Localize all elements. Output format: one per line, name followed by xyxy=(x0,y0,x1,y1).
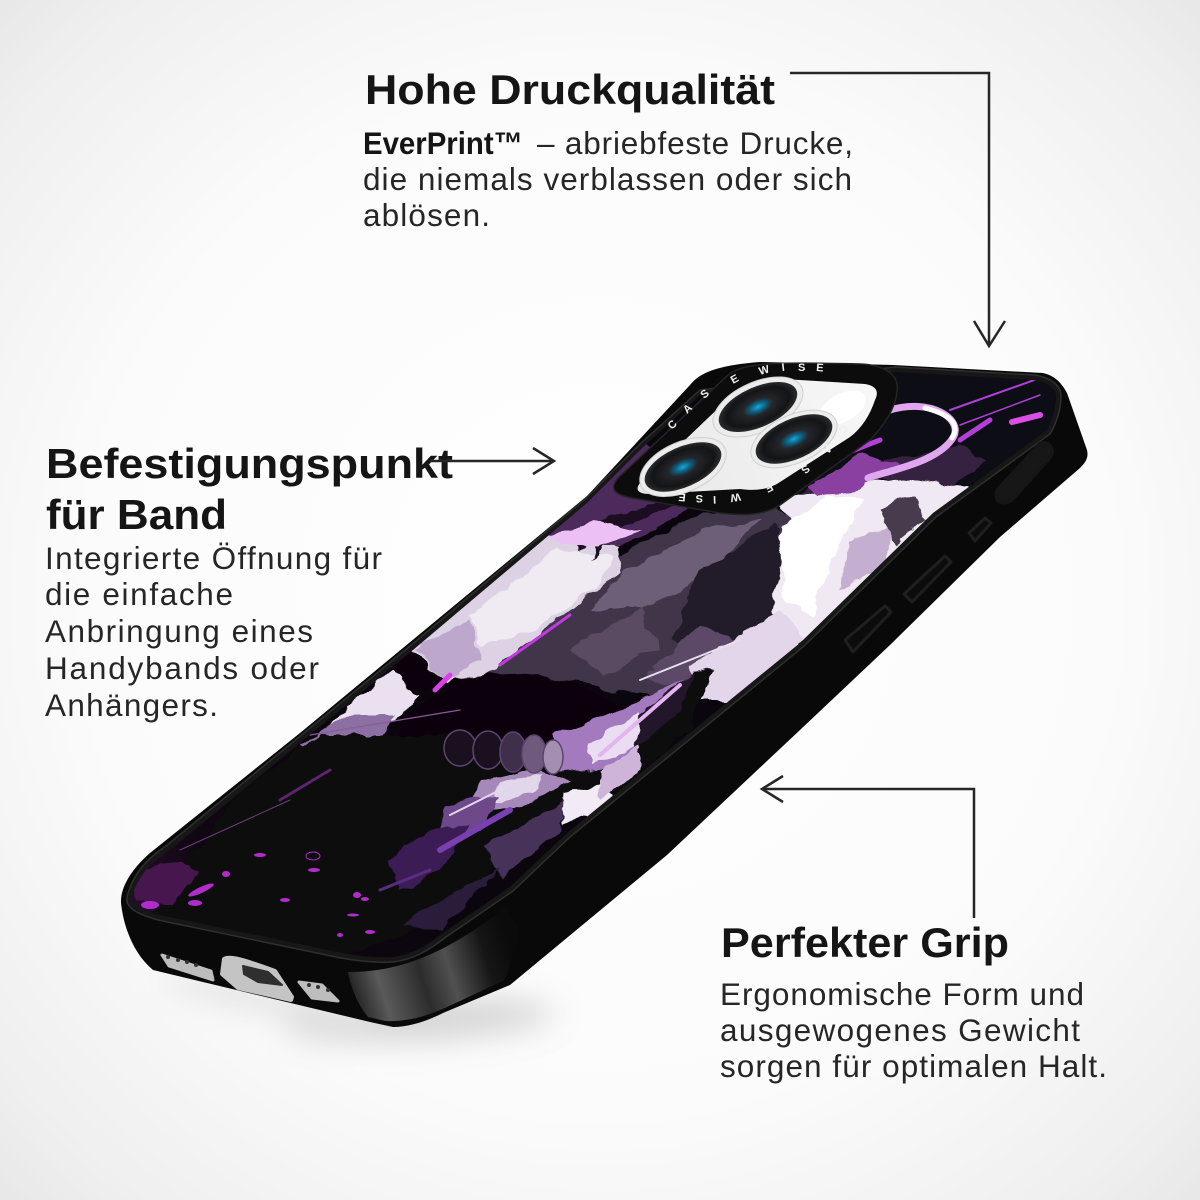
casewise ring lettering: C xyxy=(666,417,680,432)
body: print quality: ablösen. xyxy=(363,197,490,233)
casewise ring lettering: W xyxy=(728,490,742,504)
black hull xyxy=(400,672,632,742)
white band to right of cloak xyxy=(690,610,805,700)
casewise ring lettering: S xyxy=(698,387,712,401)
flash highlight xyxy=(812,383,872,433)
upper dark zone xyxy=(700,360,1080,510)
camera bumper ring xyxy=(614,363,897,514)
lavender cloud xyxy=(405,535,622,686)
arrow: strap attachment xyxy=(430,448,554,474)
artwork on case back xyxy=(132,372,1056,958)
heading: grip: Perfekter Grip xyxy=(721,919,1009,966)
casewise ring lettering: I xyxy=(712,493,716,505)
body: strap attachment: Anbringung eines xyxy=(45,613,313,649)
body: grip: sorgen für optimalen Halt. xyxy=(720,1048,1107,1084)
body: grip xyxy=(720,976,1107,1084)
body: strap attachment: Integrierte Öffnung für xyxy=(45,540,382,576)
right speaker grille xyxy=(299,982,338,1001)
camera control xyxy=(996,442,1052,503)
cloak dark grey xyxy=(490,505,805,695)
bumper rim xyxy=(127,367,1061,962)
side button xyxy=(969,518,991,541)
bottom ports xyxy=(162,955,338,1001)
foam cluster xyxy=(470,770,570,812)
left white cloud xyxy=(328,670,420,730)
arrow: print quality xyxy=(790,73,1005,346)
casewise ring lettering: E xyxy=(729,372,742,387)
lower dark mass xyxy=(150,668,715,955)
case body xyxy=(121,362,1088,1027)
purple cloud under ring xyxy=(800,445,990,495)
casewise ring lettering: C xyxy=(835,422,850,437)
upper left purple smear xyxy=(548,444,688,547)
body: grip: Ergonomische Form und xyxy=(720,976,1084,1012)
casewise ring lettering: E xyxy=(762,480,775,495)
casewise ring lettering: E xyxy=(816,362,825,375)
artwork base xyxy=(132,394,976,958)
lens top xyxy=(704,365,812,449)
body: grip: ausgewogenes Gewicht xyxy=(720,1012,1080,1048)
casewise ring lettering: A xyxy=(819,442,834,457)
heading: strap attachment: für Band xyxy=(46,491,227,538)
dark figure on right xyxy=(880,495,925,545)
body: print quality: EverPrint™ xyxy=(363,125,523,161)
bright white burst xyxy=(772,478,968,648)
casewise ring lettering: E xyxy=(677,490,686,503)
magenta streaks xyxy=(180,378,1040,890)
casewise ring lettering: W xyxy=(758,363,772,378)
casewise ring lettering: S xyxy=(695,492,703,504)
heading: print quality: Hohe Druckqualität xyxy=(365,66,775,113)
drop shadow under phone xyxy=(160,965,556,1047)
arrow: grip xyxy=(762,776,974,918)
purple lit armor xyxy=(555,680,685,772)
black sword xyxy=(390,650,443,695)
body: strap attachment: die einfache xyxy=(45,576,233,612)
callout: print quality xyxy=(363,66,1005,346)
casewise ring lettering: S xyxy=(798,362,806,374)
magenta specks xyxy=(141,852,375,937)
left speaker grille xyxy=(162,955,213,980)
spine ribs xyxy=(444,730,563,774)
body: strap attachment: Anhängers. xyxy=(45,687,218,723)
lower right white cloud xyxy=(563,784,612,824)
callout: grip xyxy=(720,776,1107,1084)
usb-c opening xyxy=(243,966,282,985)
action button xyxy=(845,606,891,652)
body: print quality xyxy=(363,125,853,233)
body: strap attachment: Handybands oder xyxy=(45,650,319,686)
hair spikes xyxy=(577,502,674,562)
volume button xyxy=(904,556,951,602)
usb-c port xyxy=(222,958,292,1000)
speaker holes xyxy=(166,955,330,992)
side buttons xyxy=(845,442,1052,652)
camera island xyxy=(614,362,897,514)
casewise ring lettering xyxy=(666,362,850,505)
corner highlight on case xyxy=(348,908,520,1021)
casewise ring lettering: I xyxy=(781,362,786,374)
lens right xyxy=(742,398,846,480)
phone in case xyxy=(100,340,1100,1027)
body: strap attachment xyxy=(45,540,382,723)
body: print quality: – abriebfeste Drucke, xyxy=(537,125,853,161)
callout: strap attachment xyxy=(45,440,554,723)
casewise ring lettering: A xyxy=(681,401,696,416)
purple smoke lower middle xyxy=(385,825,470,890)
purple ring xyxy=(868,406,955,478)
body: print quality: die niemals verblassen oder sich xyxy=(363,161,852,197)
lens left xyxy=(631,425,735,509)
casewise ring lettering: S xyxy=(798,462,812,476)
magenta band xyxy=(810,455,900,495)
heading: strap attachment: Befestigungspunkt xyxy=(46,440,453,487)
camera glass plate xyxy=(638,380,877,494)
heading: strap attachment xyxy=(46,440,453,538)
